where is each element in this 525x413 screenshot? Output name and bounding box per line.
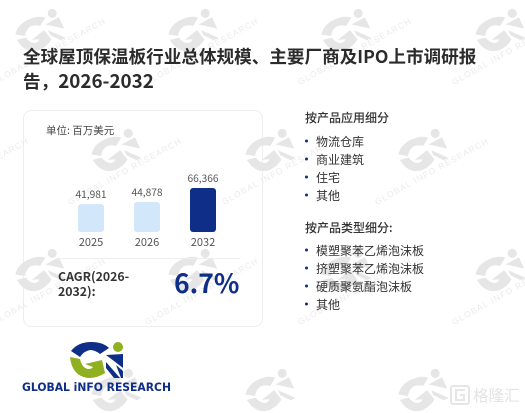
list: types: 硬质聚氨酯泡沫板: [316, 278, 412, 295]
bar 2025: 2025: [79, 234, 103, 250]
bar chart: [75, 170, 219, 250]
bar 2032: 2032: [191, 234, 215, 250]
watermarks: GLOBAL INFO RESEARCH: [373, 136, 490, 207]
bar 2026: [131, 184, 163, 250]
title: 全球屋顶保温板行业总体规模、主要厂商及IPO上市调研报: [23, 44, 477, 69]
CAGR label: 2032):: [58, 282, 96, 300]
watermarks: GLOBAL INFO RESEARCH: [66, 136, 183, 207]
list: applications: 其他: [316, 187, 340, 204]
list: applications: 物流仓库: [316, 133, 364, 150]
unit label: 单位: 百万美元: [46, 123, 115, 138]
logo: Global Info Research: GLOBAL iNFO RESEARCH: [22, 380, 171, 394]
CAGR value: 6.7%: [174, 262, 239, 301]
heading: by application: 按产品应用细分: [305, 109, 389, 126]
watermark: Gelonghui logo: 格隆汇: [473, 384, 520, 406]
CAGR label: [58, 267, 129, 300]
list: types: 其他: [316, 296, 340, 313]
watermarks: GLOBAL INFO RESEARCH: [220, 136, 337, 207]
CAGR label: CAGR(2026-: [58, 267, 129, 285]
list: types: [305, 242, 424, 313]
title: 告，2026-2032: [23, 67, 154, 94]
watermarks: GLOBAL INFO RESEARCH: [143, 256, 260, 327]
bar 2032: 66,366: [187, 170, 219, 185]
list: types: 模塑聚苯乙烯泡沫板: [316, 242, 424, 259]
watermarks: GLOBAL INFO RESEARCH: [296, 16, 413, 87]
logo: Global Info Research: [22, 342, 171, 394]
list: applications: 住宅: [316, 169, 340, 186]
list: applications: [305, 133, 364, 204]
watermarks: GLOBAL INFO RESEARCH: [143, 16, 260, 87]
bar 2025: [75, 186, 107, 250]
card background: [24, 110, 262, 326]
bar 2025: 41,981: [75, 186, 107, 201]
list: types: 挤塑聚苯乙烯泡沫板: [316, 260, 424, 277]
list: applications: 商业建筑: [316, 151, 364, 168]
bar 2026: 44,878: [131, 184, 163, 199]
heading: by type: 按产品类型细分:: [305, 219, 393, 236]
bar 2032: [187, 170, 219, 250]
watermark: Gelonghui logo: [451, 384, 520, 406]
watermarks: GLOBAL INFO RESEARCH: [296, 256, 413, 327]
bar 2026: 2026: [135, 234, 159, 250]
title: [23, 44, 477, 94]
